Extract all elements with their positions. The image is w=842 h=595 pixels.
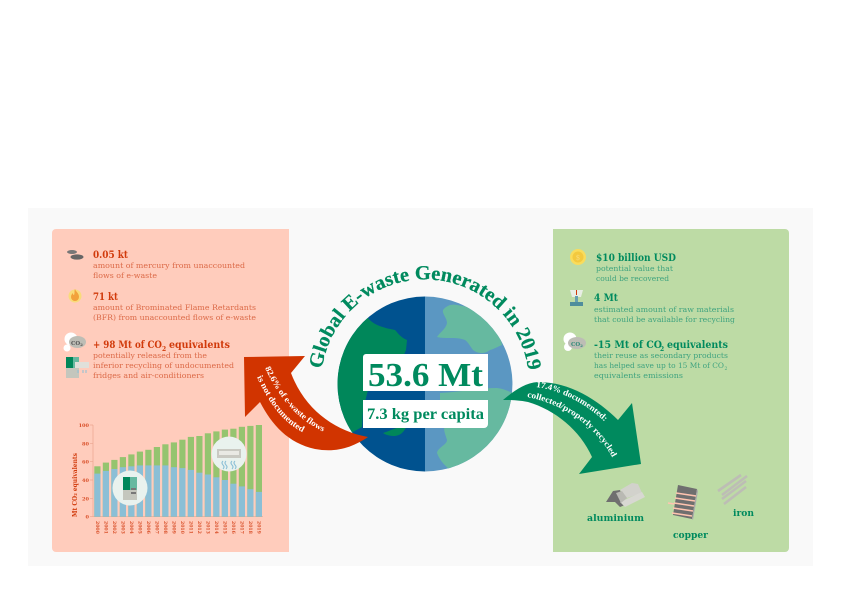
arrow: undocumented 82.6% — [244, 356, 368, 450]
year labels: 2014 — [213, 521, 219, 535]
stat: flame retardants: amount of Brominated Flame Retardants — [93, 303, 256, 312]
stat: CO2 released: + 98 Mt of CO — [93, 340, 162, 351]
stat: flame retardants: (BFR) from unaccounted flows of e-waste — [93, 313, 257, 322]
year labels: 2004 — [128, 521, 134, 535]
stat: recoverable value: could be recovered — [596, 274, 669, 283]
icon: copper coil — [668, 485, 698, 520]
year labels: 2019 — [256, 521, 262, 534]
stat: CO2 saved: 2 — [660, 346, 664, 353]
stat: raw materials — [594, 293, 735, 324]
stat: raw materials: that could be available for recycling — [594, 315, 735, 324]
stat: CO2 released — [93, 340, 234, 380]
year labels — [94, 521, 262, 535]
y axis: 20 — [82, 496, 90, 502]
icon: CO2 cloud green — [564, 332, 586, 351]
globe left hemisphere — [338, 296, 425, 472]
stat: recoverable value: $10 billion USD — [596, 253, 676, 264]
stat: CO2 released: potentially released from the — [93, 351, 208, 360]
y axis: 100 — [79, 423, 90, 429]
bar chart: CO2 equivalents 2000-2019 — [72, 423, 263, 535]
continents right — [437, 304, 512, 468]
arrow: documented 17.4%: 17.4% documented: — [536, 382, 606, 421]
icon: CO2 cloud: 2 — [80, 342, 83, 347]
stat: recoverable value: potential value that — [596, 264, 673, 273]
stat: CO2 released: fridges and air-conditioners — [93, 371, 204, 380]
icon: scale — [570, 290, 583, 306]
y axis: 0 — [86, 515, 90, 521]
icon: mercury — [67, 250, 84, 260]
globe — [338, 296, 512, 472]
icon: CO2 cloud green: CO — [571, 342, 580, 348]
label: copper: copper — [673, 531, 708, 541]
stat: CO2 saved: has helped save up to 15 Mt of CO — [594, 361, 724, 370]
background panel — [28, 208, 813, 566]
icon: flame — [68, 289, 82, 302]
year labels: 2012 — [196, 521, 202, 534]
stacked bars — [94, 425, 262, 517]
stat: CO2 saved: -15 Mt of CO — [594, 340, 662, 351]
stat: mercury: amount of mercury from unaccounted — [93, 261, 245, 270]
stat: CO2 saved: 2 — [724, 366, 728, 372]
stat: raw materials: 4 Mt — [594, 293, 618, 304]
title arc: Global E-waste Generated in 2019 — [310, 266, 541, 369]
icon: CO2 cloud: CO — [71, 341, 80, 347]
stat: raw materials: estimated amount of raw materials — [594, 305, 734, 314]
y axis title: Mt CO₂ equivalents — [72, 452, 79, 517]
stat: CO2 saved: equivalents emissions — [594, 371, 683, 380]
stat: CO2 released: inferior recycling of undocumented — [93, 361, 234, 370]
y axis: 60 — [82, 460, 90, 466]
stat: CO2 saved: equivalents — [667, 340, 728, 351]
year labels: 2002 — [111, 521, 117, 534]
icon: aluminium ingots — [606, 483, 645, 507]
year labels: 2011 — [188, 521, 194, 534]
y axis: 80 — [82, 441, 90, 447]
y axis — [79, 423, 263, 521]
stat: CO2 released: equivalents — [169, 340, 230, 351]
year labels: 2003 — [120, 521, 126, 534]
arrow: undocumented 82.6%: is not documented — [257, 375, 305, 432]
arrow: documented 17.4% — [503, 382, 641, 474]
label: iron: iron — [733, 509, 754, 519]
year labels: 2006 — [145, 521, 151, 534]
icon: iron bars — [718, 475, 747, 504]
year labels: 2001 — [102, 521, 108, 534]
icon: CO2 cloud — [64, 332, 86, 352]
year labels: 2017 — [238, 521, 244, 534]
stat: CO2 saved: their reuse as secondary products — [594, 351, 728, 360]
stat: CO2 saved — [594, 340, 728, 380]
year labels: 2008 — [162, 521, 168, 534]
stat: mercury: 0.05 kt — [93, 250, 128, 261]
globe right hemisphere — [425, 296, 512, 472]
icon: coin — [570, 249, 586, 265]
year labels: 2016 — [230, 521, 236, 534]
stat: mercury — [93, 250, 245, 280]
per capita box: 7.3 kg per capita — [367, 406, 484, 423]
icon: fridge in chart — [112, 470, 148, 506]
stat: CO2 released: 2 — [162, 346, 166, 353]
stat: flame retardants: 71 kt — [93, 292, 118, 303]
stat: recoverable value — [596, 253, 676, 283]
year labels: 2013 — [204, 521, 210, 534]
panel: documented flows — [553, 229, 789, 552]
year labels: 2009 — [170, 521, 176, 534]
year labels: 2015 — [222, 521, 228, 534]
year labels: 2007 — [154, 521, 160, 534]
arrow: documented 17.4%: collected/properly recycled — [528, 393, 618, 458]
main figure box: 53.6 Mt — [368, 357, 484, 394]
icon: coin: $ — [576, 254, 580, 262]
panel: undocumented flows — [52, 229, 289, 552]
icon: CO2 cloud green: 2 — [580, 343, 583, 348]
arrow: undocumented 82.6%: 82.6% of e-waste flows — [266, 366, 324, 432]
stat: mercury: flows of e-waste — [93, 271, 158, 280]
icon: air conditioner in chart — [212, 436, 246, 472]
year labels: 2018 — [247, 521, 253, 534]
icon: fridge and air conditioner — [66, 357, 89, 378]
y axis: 40 — [82, 478, 90, 484]
continents left — [338, 318, 407, 436]
year labels: 2010 — [179, 521, 185, 534]
label: aluminium: aluminium — [587, 514, 644, 524]
year labels: 2005 — [136, 521, 142, 534]
per capita box — [363, 400, 488, 428]
year labels: 2000 — [94, 521, 100, 534]
stat: flame retardants — [93, 292, 257, 322]
